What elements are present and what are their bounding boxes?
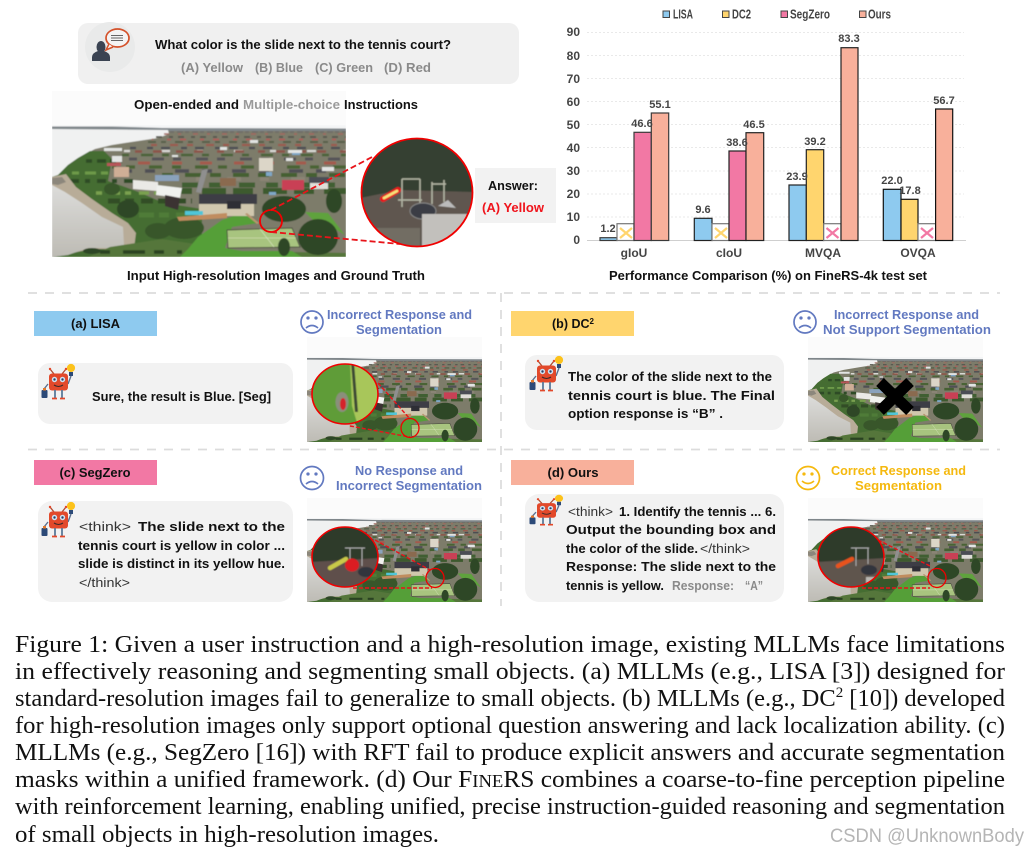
value labels <box>600 33 955 235</box>
figure caption text: with reinforcement learning, enabling unified, precise instruction-guided reasoning and segmentation <box>15 793 1005 820</box>
value labels: 9.6 <box>695 204 711 216</box>
multiple choice options: (C) Green <box>315 61 373 75</box>
chat bubble: SegZero response: slide is distinct in its yellow hue. <box>78 557 285 571</box>
chat bubble: Ours response <box>525 494 784 602</box>
chat bubble: Ours response: <think> <box>568 505 613 519</box>
verdict heading <box>336 463 482 493</box>
photo: input high-resolution aerial image <box>52 125 346 257</box>
label: LISA <box>34 311 157 336</box>
chat bubble: Ours response: 1. Identify the tennis ... 6. <box>619 505 776 519</box>
bars: MVQA <box>789 48 858 241</box>
label: SegZero <box>34 460 157 485</box>
value labels: 46.6 <box>631 118 653 130</box>
chart legend <box>663 8 891 22</box>
multiple choice options: (D) Red <box>384 61 431 75</box>
value labels: 83.3 <box>838 33 860 45</box>
bars: OVQA <box>883 109 953 240</box>
y axis labels: 80 <box>567 49 580 63</box>
icon: happy face <box>796 466 820 490</box>
heading: instructions: Instructions <box>344 98 418 112</box>
chat bubble: DC2 response: The color of the slide next to the <box>568 370 772 384</box>
chart legend: Ours <box>868 8 891 22</box>
chat bubble: SegZero response <box>38 501 293 602</box>
icon: sad face <box>300 466 324 490</box>
figure caption text: in effectively reasoning and segmenting small objects. (a) MLLMs (e.g., LISA [3]) designed for <box>15 658 1005 685</box>
verdict heading <box>831 463 966 493</box>
figure caption text: MLLMs (e.g., SegZero [16]) with RFT fail to produce explicit answers and accurate segmentation <box>15 739 1005 766</box>
icon: robot <box>42 364 75 398</box>
chat bubble: Ours response: “A” <box>745 579 763 593</box>
answer box: (A) Yellow <box>482 201 544 215</box>
chat bubble: Ours response: tennis is yellow. <box>566 579 664 593</box>
figure caption text: standard-resolution images fail to generalize to small objects. (b) MLLMs (e.g., DC <box>15 685 836 712</box>
label: DC2: 2 <box>590 317 595 326</box>
bars: gIoU <box>600 113 669 240</box>
icon: robot <box>42 502 75 536</box>
label: DC2: (b) DC <box>552 317 590 331</box>
y axis labels: 70 <box>567 72 580 86</box>
caption: input images: Input High-resolution Images and Ground Truth <box>127 269 425 283</box>
heading: instructions <box>134 98 418 112</box>
answer box: Answer: <box>488 179 538 193</box>
value labels: 46.5 <box>743 119 765 131</box>
label: Ours: (d) Ours <box>548 466 599 480</box>
chart legend: DC2 <box>732 8 751 22</box>
multiple choice options <box>181 61 431 75</box>
bar chart: performance comparison <box>567 25 966 260</box>
chat bubble: Ours response: </think> <box>700 542 750 556</box>
verdict heading: Incorrect Response and <box>834 307 979 322</box>
verdict heading <box>823 307 991 337</box>
value labels: 1.2 <box>600 223 616 235</box>
x axis labels: OVQA <box>900 246 936 260</box>
photo: DC2 no segmentation <box>808 337 983 442</box>
figure caption text: for high-resolution images only support optional question answering and lack localization ability. (c) <box>15 712 1005 739</box>
x axis labels: MVQA <box>805 246 841 260</box>
figure caption text: Figure 1: Given a user instruction and a high-resolution image, existing MLLMs face limitations <box>15 631 1005 658</box>
verdict heading: Segmentation <box>356 322 442 337</box>
icon: user with speech bubble <box>85 22 135 72</box>
chat bubble: SegZero response: <think> <box>79 520 131 534</box>
chat bubble: LISA response: Sure, the result is Blue. [Seg] <box>92 390 271 404</box>
figure caption text: masks within a unified framework. (d) Our F INERS combines a coarse-to-fine perception pipeline <box>15 766 1005 793</box>
y axis labels: 30 <box>567 164 580 178</box>
chart legend: SegZero <box>790 8 830 22</box>
verdict heading: Not Support Segmentation <box>823 322 991 337</box>
verdict heading: No Response and <box>355 463 463 478</box>
y axis labels: 20 <box>567 187 580 201</box>
question text: What color is the slide next to the tennis court? <box>155 38 451 52</box>
verdict heading: Correct Response and <box>831 463 966 478</box>
multiple choice options: (B) Blue <box>255 61 303 75</box>
verdict heading: Incorrect Response and <box>327 307 472 322</box>
chat bubble: SegZero response: The slide next to the <box>138 520 285 534</box>
figure caption text: 2 <box>836 685 843 701</box>
verdict heading <box>327 307 472 337</box>
chat bubble: DC2 response: option response is “B” . <box>568 407 723 421</box>
panel: user question <box>78 22 519 84</box>
icon: robot <box>530 356 563 390</box>
value labels: 39.2 <box>804 136 826 148</box>
x axis labels: cIoU <box>716 246 742 260</box>
x axis labels: gIoU <box>621 246 647 260</box>
y axis labels: 50 <box>567 118 580 132</box>
x axis labels <box>621 246 936 260</box>
chat bubble: Ours response: Response: The slide next to the <box>566 560 776 574</box>
value labels: 55.1 <box>649 99 671 111</box>
label: DC2 <box>511 311 634 336</box>
dashed zoom connector lines <box>271 156 400 244</box>
chat bubble: Ours response: Response: <box>672 579 734 593</box>
panel: (b) DC2 <box>511 307 991 442</box>
photo: Ours segmentation <box>808 518 983 602</box>
photo: LISA segmentation <box>307 357 482 442</box>
value labels: 22.0 <box>881 175 903 187</box>
icon: robot <box>530 495 563 525</box>
value labels: 38.6 <box>726 137 748 149</box>
magnified ground truth circle <box>360 137 477 250</box>
chat bubble: Ours response: Output the bounding box and <box>566 523 776 537</box>
chat bubble: SegZero response: </think> <box>79 576 130 590</box>
panel: (d) Ours <box>511 460 983 602</box>
label: SegZero: (c) SegZero <box>60 466 131 480</box>
heading: instructions: Multiple-choice <box>243 98 340 112</box>
label: LISA: (a) LISA <box>71 317 120 331</box>
photo: SegZero segmentation <box>307 518 482 602</box>
figure caption text: [10]) developed <box>843 685 1005 712</box>
chart title: Performance Comparison (%) on FineRS-4k test set <box>609 269 928 283</box>
y axis labels: 10 <box>567 210 580 224</box>
heading: instructions: Open-ended and <box>134 98 239 112</box>
y axis labels <box>567 25 580 247</box>
photo: haze above input image <box>52 91 346 125</box>
value labels: 17.8 <box>899 185 921 197</box>
value labels: 23.9 <box>786 171 808 183</box>
red target circle on the photo <box>260 210 282 232</box>
chat bubble: DC2 response <box>525 355 784 430</box>
chart legend: LISA <box>673 8 693 22</box>
icon: sad face <box>301 311 323 333</box>
watermark: CSDN @UnknownBody <box>830 826 1024 847</box>
multiple choice options: (A) Yellow <box>181 61 243 75</box>
y axis labels: 60 <box>567 95 580 109</box>
answer box <box>475 168 556 223</box>
chat bubble: LISA response <box>38 363 293 424</box>
verdict heading: Segmentation <box>855 478 942 493</box>
y axis labels: 40 <box>567 141 580 155</box>
verdict heading: Incorrect Segmentation <box>336 478 482 493</box>
chat bubble: Ours response: the color of the slide. <box>566 542 698 556</box>
y axis labels: 0 <box>573 233 580 247</box>
figure caption text <box>15 631 1005 848</box>
figure caption text: of small objects in high-resolution images. <box>15 821 439 848</box>
label: Ours <box>511 460 634 485</box>
panel: (c) SegZero <box>34 460 482 602</box>
y axis labels: 90 <box>567 25 580 39</box>
panel: (a) LISA <box>34 307 482 442</box>
icon: sad face <box>794 311 816 333</box>
value labels: 56.7 <box>933 95 955 107</box>
bars: cIoU <box>694 133 764 240</box>
chat bubble: SegZero response: tennis court is yellow in color ... <box>78 539 285 553</box>
chat bubble: DC2 response: tennis court is blue. The Final <box>568 389 775 403</box>
